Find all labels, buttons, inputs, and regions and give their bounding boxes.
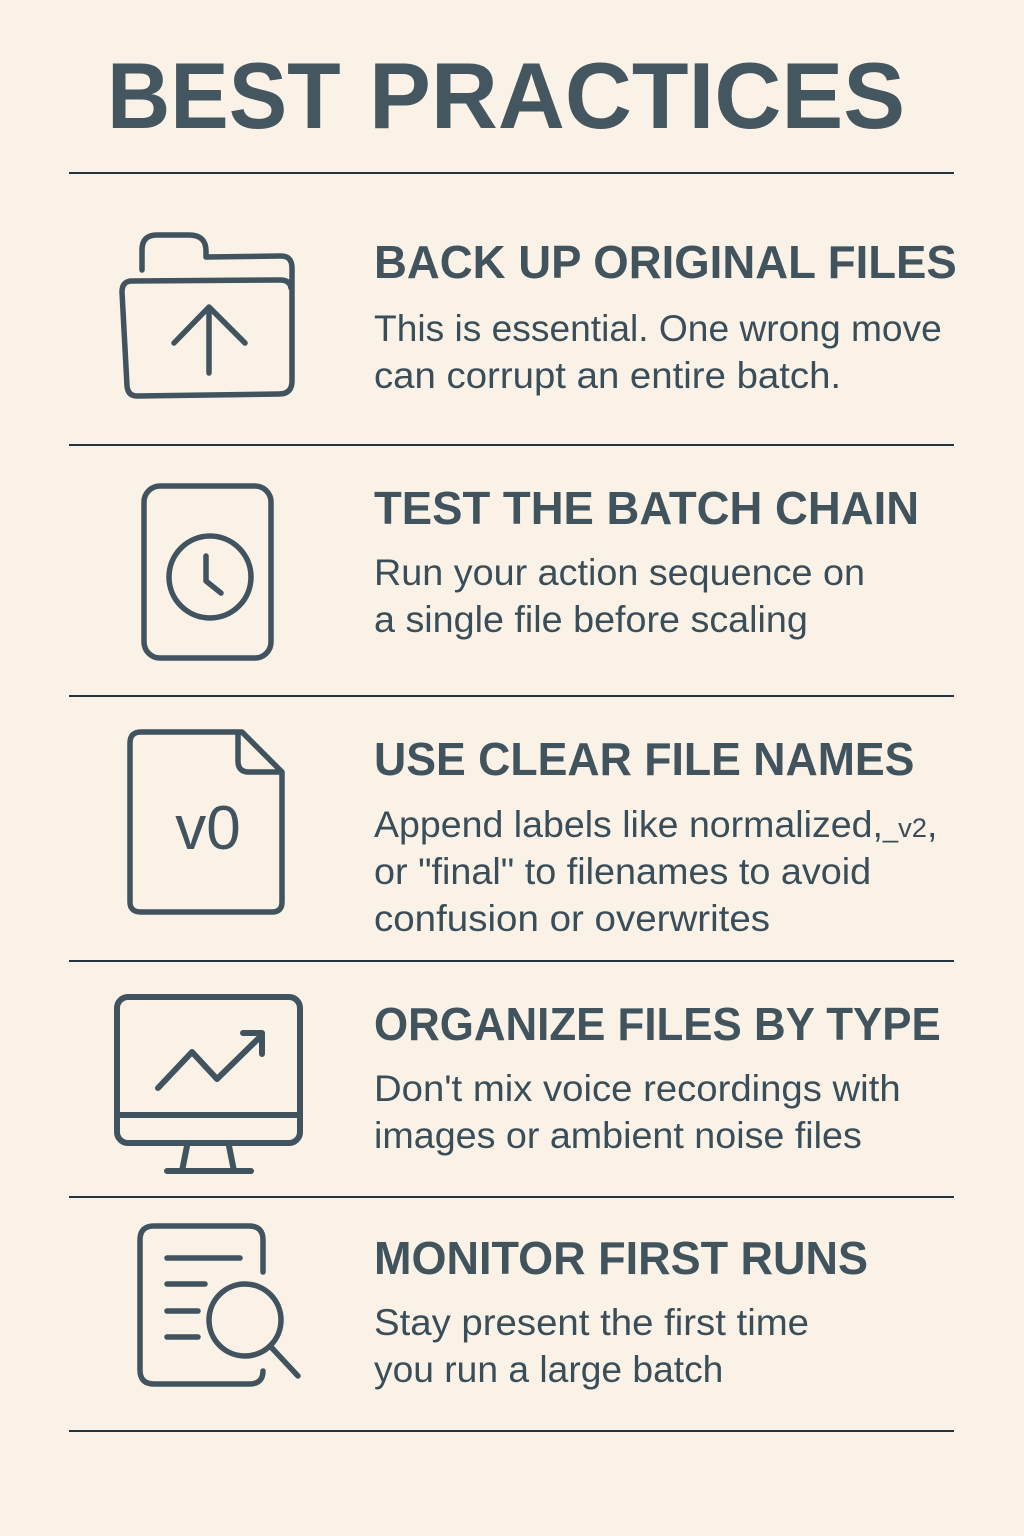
heading: ORGANIZE FILES BY TYPE (374, 998, 941, 1050)
icon: tablet with clock (141, 483, 274, 661)
title: PRACTICES (369, 43, 905, 148)
text block: a single file before scaling (374, 599, 808, 640)
text block: Stay present the first time (374, 1302, 809, 1343)
panel: monitor first runs (137, 1223, 868, 1390)
icon: document v0 (127, 729, 285, 915)
panel: organize files by type (114, 994, 941, 1174)
text block: Don't mix voice recordings with (374, 1068, 901, 1109)
panel: back up original files (119, 232, 957, 399)
text block (374, 1068, 901, 1156)
text block: can corrupt an entire batch. (374, 355, 841, 396)
title: BEST (107, 43, 341, 148)
icon: document v0: v0 (175, 794, 241, 863)
icon: folder with up arrow (119, 232, 295, 399)
text block: confusion or overwrites (374, 898, 770, 939)
text block: Append labels like normalized,_v2, (374, 804, 937, 845)
panel: use clear file names (127, 729, 937, 939)
text block (374, 804, 937, 939)
icon: document with magnifier (137, 1223, 301, 1387)
title (107, 43, 905, 148)
heading: BACK UP ORIGINAL FILES (374, 236, 957, 288)
heading: MONITOR FIRST RUNS (374, 1232, 868, 1284)
text block (374, 1302, 809, 1390)
text block (374, 308, 942, 396)
icon: monitor with trend line (114, 994, 303, 1174)
text block: you run a large batch (374, 1349, 723, 1390)
heading: TEST THE BATCH CHAIN (374, 482, 919, 534)
text block: images or ambient noise files (374, 1115, 862, 1156)
panel: test the batch chain (141, 482, 919, 661)
text block: or "final" to filenames to avoid (374, 851, 871, 892)
text block: Run your action sequence on (374, 552, 865, 593)
text block (374, 552, 865, 640)
heading: USE CLEAR FILE NAMES (374, 733, 914, 785)
text block: This is essential. One wrong move (374, 308, 942, 349)
